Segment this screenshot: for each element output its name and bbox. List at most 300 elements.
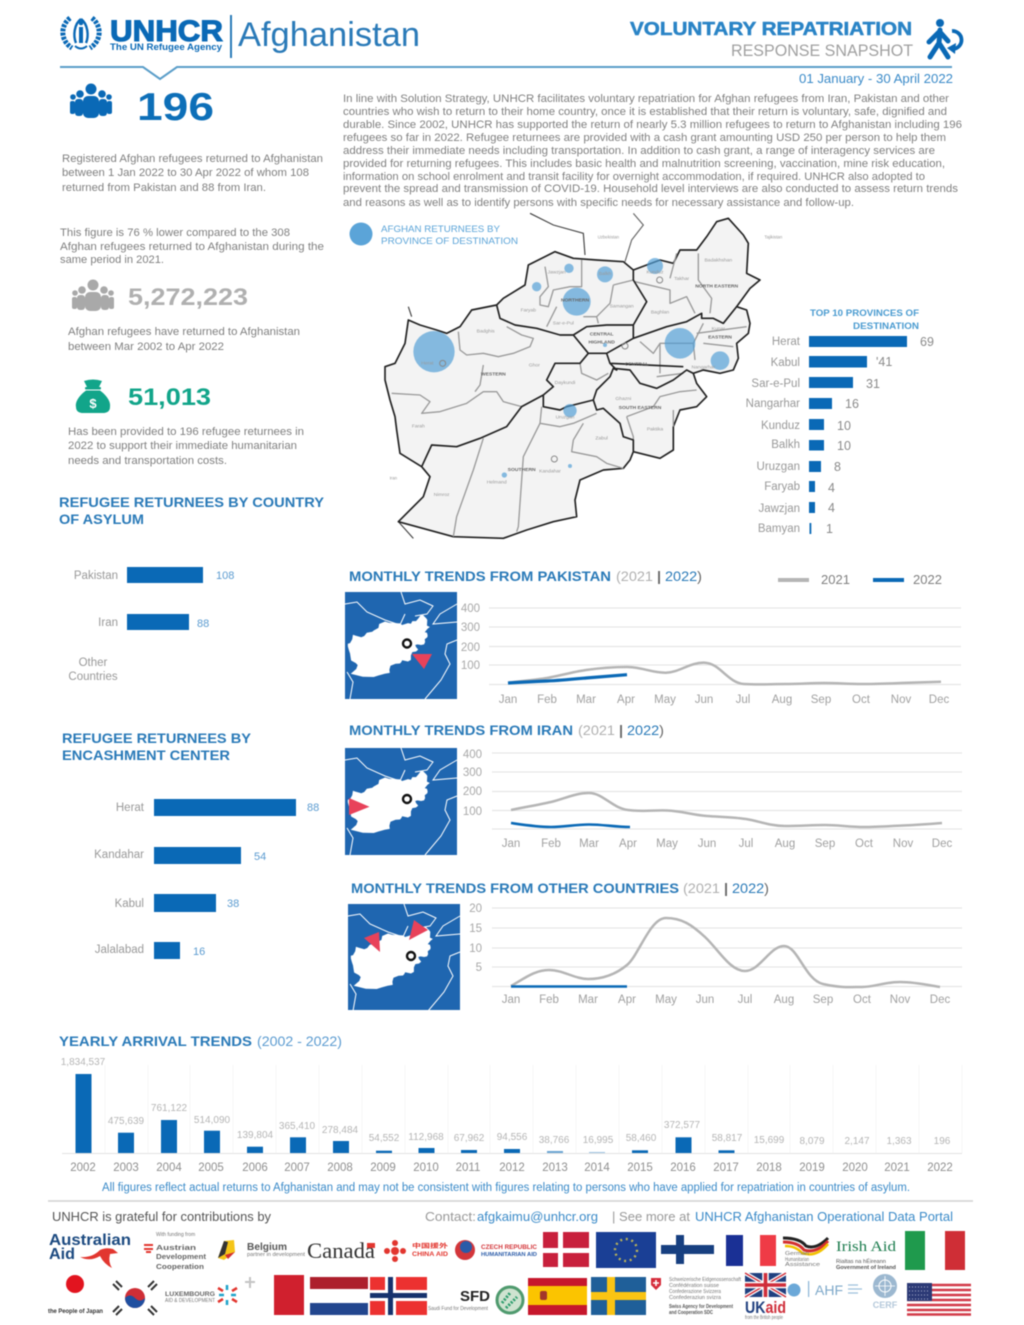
- flag: Spain: [528, 1278, 587, 1315]
- text: registered refugees: between 1 Jan 2022 to 30 Apr 2022 of whom 108: [62, 167, 309, 179]
- icon: person walking with return arrow: [929, 19, 962, 57]
- map labels: [390, 235, 783, 498]
- logo: Australian Aid: Australian: [49, 1232, 131, 1249]
- province labels: Kunduz: [761, 420, 800, 432]
- logo: China Aid: 中国援外: [412, 1242, 448, 1250]
- flag: Italy: [905, 1231, 965, 1270]
- icon: people group grey: [72, 280, 114, 311]
- line chart: other countries: Jan: [502, 994, 520, 1006]
- text: cash grant description: needs and transportation costs.: [68, 455, 227, 467]
- mini map: Iran route: [345, 748, 457, 855]
- icon: UNHCR wreath emblem: [63, 18, 99, 48]
- line chart: Iran: Apr: [619, 838, 637, 850]
- values: 8: [834, 460, 841, 474]
- values: '41: [876, 355, 892, 369]
- line chart: Pakistan: 200: [461, 642, 480, 654]
- heading: returnees by country of asylum: OF ASYLUM: [59, 511, 144, 527]
- footer: thanks: UNHCR is grateful for contributions by: [52, 1209, 271, 1224]
- flag: France: [726, 1235, 776, 1266]
- values: 16: [845, 397, 859, 411]
- province labels: Faryab: [764, 481, 800, 493]
- map labels: CENTRAL: [625, 361, 649, 367]
- flag: Finland: [661, 1235, 714, 1264]
- line chart: other countries: 20: [469, 903, 482, 915]
- yearly axis labels: 2006: [242, 1162, 268, 1174]
- map labels: Badakhshan: [704, 258, 732, 264]
- map labels: Kunar: [712, 326, 725, 332]
- map labels: Nangarhar: [692, 364, 715, 370]
- map labels: Kunduz: [647, 269, 664, 275]
- chart: returnees by country: 108: [216, 570, 234, 582]
- yearly axis labels: 2013: [542, 1162, 568, 1174]
- logo: UK aid: from the British people: [745, 1315, 783, 1321]
- logo: Germany: German: [785, 1251, 809, 1257]
- yearly axis labels: 2016: [670, 1162, 696, 1174]
- line chart: other countries: 15: [469, 923, 482, 935]
- line chart: Pakistan: Nov: [891, 694, 911, 706]
- map bubbles: [413, 258, 729, 478]
- logo: Korea: [113, 1281, 157, 1315]
- intro paragraph: address their immediate needs including transportation. In addition to cash grant, a range of interagency services are: [343, 145, 935, 157]
- header rule with notch: [60, 67, 952, 79]
- map region borders: [422, 270, 737, 467]
- text: comparison: [60, 227, 324, 266]
- logo: Switzerland: Confederaziun svizra: [669, 1295, 721, 1301]
- text: cash grant description: 2022 to support their immediate humanitarian: [68, 440, 297, 452]
- map country shape: [385, 218, 760, 538]
- heading: returnees by encashment center: ENCASHMENT CENTER: [62, 747, 230, 763]
- yearly value labels: 54,552: [369, 1133, 400, 1144]
- chart: encashment center: Kandahar: [94, 849, 144, 861]
- heading: returnees by country of asylum: REFUGEE RETURNEES BY COUNTRY: [59, 494, 325, 510]
- heading: voluntary repatriation: VOLUNTARY REPATRIATION: [630, 19, 912, 39]
- flag: Norway: [370, 1277, 427, 1315]
- map labels: Iran: [390, 475, 398, 480]
- logo: UK aid: UKaid: [745, 1298, 786, 1317]
- yearly value labels: 16,995: [583, 1135, 614, 1146]
- logo: AHF: [788, 1281, 862, 1298]
- line chart: Pakistan: 400: [461, 603, 480, 615]
- text: cash grant description: Has been provided to 196 refugee returnees in: [68, 426, 304, 438]
- flag: United States: [907, 1283, 971, 1315]
- logo: Irish Aid: Government of Ireland: [836, 1265, 896, 1271]
- line chart: Pakistan: Jul: [736, 694, 750, 706]
- map labels: Jawzjan: [548, 269, 566, 275]
- intro paragraph: countries who wish to return to their home country, once it is established that their return is voluntary, safe, dignified and: [343, 106, 947, 118]
- province labels: Bamyan: [758, 523, 800, 535]
- line chart: Iran: Aug: [775, 838, 795, 850]
- line chart: Pakistan: Dec: [929, 694, 949, 706]
- yearly axis labels: 2014: [584, 1162, 610, 1174]
- chart legend: 2022: [913, 572, 942, 587]
- map: Afghanistan returnees by province: [385, 213, 783, 538]
- map labels: Helmand: [487, 479, 507, 485]
- footer: contact: [425, 1209, 953, 1224]
- map labels: SOUTH EASTERN: [619, 405, 662, 411]
- heading: yearly arrival trends: [59, 1033, 342, 1049]
- chart: returnees by country: 88: [197, 618, 209, 630]
- line chart: other countries: May: [655, 994, 677, 1006]
- intro paragraph: [343, 93, 962, 209]
- yearly axis labels: 2003: [113, 1162, 139, 1174]
- yearly axis labels: 2019: [799, 1162, 825, 1174]
- chart: returnees by country: Other: [79, 657, 108, 669]
- chart: encashment center: 88: [307, 802, 319, 814]
- yearly axis labels: 2005: [198, 1162, 224, 1174]
- map labels: NORTHERN: [561, 298, 590, 304]
- text: comparison: same period in 2021.: [60, 254, 164, 266]
- heading: yearly arrival trends: YEARLY ARRIVAL TRENDS: [59, 1033, 252, 1049]
- line chart: other countries: Apr: [618, 994, 636, 1006]
- line chart: other countries: 5: [476, 962, 482, 974]
- line chart: Iran: 200: [463, 786, 482, 798]
- province labels: Balkh: [771, 439, 800, 451]
- line chart: Iran: 300: [463, 767, 482, 779]
- yearly value labels: 1,363: [886, 1136, 912, 1147]
- line chart: Iran: Dec: [932, 838, 952, 850]
- province labels: Sar-e-Pul: [751, 378, 800, 390]
- line chart: other countries: [469, 903, 962, 1006]
- logo: Germany: Humanitarian: [785, 1257, 809, 1263]
- text: total returned description: between Mar 2002 to Apr 2022: [68, 341, 224, 353]
- yearly value labels: 94,556: [497, 1132, 528, 1143]
- yearly value labels: 112,968: [408, 1132, 444, 1143]
- chart: returnees by country: [68, 567, 234, 683]
- map labels: Daykundi: [555, 380, 575, 386]
- line chart: other countries: Dec: [930, 994, 950, 1006]
- text: total returned description: Afghan refugees have returned to Afghanistan: [68, 326, 300, 338]
- yearly axis labels: 2011: [456, 1162, 480, 1174]
- chart title: TOP 10 PROVINCES OF: [810, 308, 919, 319]
- map labels: EASTERN: [708, 334, 732, 340]
- yearly axis labels: 2017: [713, 1162, 739, 1174]
- yearly value labels: 365,410: [279, 1121, 316, 1132]
- line chart: Iran: 400: [463, 749, 482, 761]
- line chart: other countries: 10: [469, 943, 482, 955]
- map labels: Paktika: [647, 427, 663, 433]
- map labels: Badghis: [477, 328, 495, 334]
- logo: Luxembourg: LUXEMBOURG: [165, 1292, 215, 1298]
- yearly value labels: 58,460: [626, 1133, 657, 1144]
- flag: red panel: [274, 1275, 304, 1315]
- yearly value labels: 8,079: [799, 1136, 825, 1147]
- heading: yearly arrival trends: (2002 - 2022): [257, 1034, 342, 1049]
- values: 1: [826, 522, 833, 536]
- stat: 196: 196: [137, 86, 214, 129]
- line chart: other countries: Feb: [539, 994, 559, 1006]
- flag: Netherlands: [310, 1277, 368, 1315]
- chart: encashment center: [94, 799, 319, 959]
- logo: Switzerland: Schweizerische Eidgenossenschaft: [669, 1277, 742, 1283]
- line chart: other countries: Jun: [696, 994, 714, 1006]
- line chart: Pakistan: Feb: [537, 694, 557, 706]
- icon: money bag: $: [89, 396, 97, 411]
- line chart: Iran: Oct: [855, 838, 874, 850]
- flag: Sweden: [591, 1277, 646, 1315]
- line chart: Pakistan: 300: [461, 622, 480, 634]
- line chart: Pakistan: [461, 603, 961, 706]
- flag: European Union: [596, 1232, 656, 1268]
- text: total returned description: [68, 326, 300, 353]
- footer: contact: Contact:: [425, 1209, 476, 1224]
- logo: Australian Aid: Aid: [49, 1246, 75, 1263]
- province labels: Nangarhar: [746, 398, 800, 410]
- line chart: Iran: 100: [463, 806, 482, 818]
- logo: Switzerland: Confederazione Svizzera: [669, 1289, 721, 1295]
- logo: Austrian Development Cooperation: Development: [156, 1254, 207, 1261]
- heading: monthly trends from Iran: MONTHLY TRENDS FROM IRAN: [349, 722, 573, 738]
- intro paragraph: and reasons as well as to identify persons with specific needs for necessary assistance and follow-up.: [343, 197, 854, 209]
- yearly axis labels: 2009: [370, 1162, 396, 1174]
- chart: returnees by country: Pakistan: [74, 570, 118, 582]
- chart: encashment center: Herat: [116, 802, 145, 814]
- divider beside logo: [230, 15, 232, 58]
- yearly value labels: 278,484: [322, 1125, 359, 1136]
- map labels: Farah: [412, 424, 425, 430]
- map labels: Baghlan: [651, 309, 669, 315]
- logo: Switzerland: Confédération suisse: [669, 1283, 719, 1289]
- yearly value labels: 196: [934, 1136, 951, 1147]
- logo: Saudi Fund for Development: SFD: [460, 1288, 490, 1305]
- logo: Austrian Development Cooperation: Cooperation: [156, 1264, 204, 1271]
- header: UNHCR logo: The UN Refugee Agency: [110, 42, 223, 53]
- line chart: other countries: Mar: [578, 994, 598, 1006]
- yearly value labels: 475,639: [108, 1116, 145, 1127]
- intro paragraph: In line with Solution Strategy, UNHCR facilitates voluntary repatriation for Afghan refugees from Iran, Pakistan and other: [343, 93, 949, 105]
- logo: Japan: [48, 1275, 103, 1315]
- values: 4: [828, 481, 835, 495]
- yearly value labels: 58,817: [712, 1133, 743, 1144]
- line chart: Pakistan: Sep: [811, 694, 831, 706]
- logo: Belgium: partner in development: [247, 1252, 306, 1258]
- line chart: other countries: Nov: [890, 994, 910, 1006]
- logo: China Aid: [384, 1240, 449, 1262]
- yearly value labels: 2,147: [844, 1136, 870, 1147]
- stat: cash grant: 51,013: [128, 384, 211, 411]
- map province borders: [392, 253, 747, 537]
- yearly axis labels: 2021: [884, 1162, 910, 1174]
- province labels: Uruzgan: [757, 461, 800, 473]
- yearly value labels: 514,090: [194, 1115, 231, 1126]
- line chart: Iran: May: [656, 838, 678, 850]
- map neighbours borders: [398, 213, 585, 538]
- footer: contact: | See more at: [612, 1209, 690, 1224]
- heading: returnees by encashment center: REFUGEE RETURNEES BY: [62, 730, 252, 746]
- yearly value labels: 1,834,537: [61, 1057, 106, 1068]
- heading: monthly trends from Iran: (2021 | 2022): [578, 723, 664, 738]
- line chart: Iran: Jan: [502, 838, 520, 850]
- heading: monthly trends from other countries: (2021 | 2022): [683, 881, 769, 896]
- map labels: Ghor: [529, 363, 540, 369]
- line chart: Pakistan: Apr: [617, 694, 635, 706]
- heading: returnees by country of asylum: [59, 494, 325, 527]
- title: Afghanistan: [238, 16, 420, 54]
- intro paragraph: provided for returning refugees. This includes basic health and malnutrition screening, vaccination, mine risk education,: [343, 158, 945, 170]
- logo: Switzerland: and Cooperation SDC: [669, 1310, 713, 1316]
- logo: Japan: the People of Japan: [48, 1309, 103, 1315]
- intro paragraph: durable. Since 2002, UNHCR has supported the return of nearly 5.3 million refugees to return to Afghanistan including 196: [343, 119, 962, 131]
- map labels: Nimroz: [434, 492, 450, 498]
- heading: monthly trends from other countries: MONTHLY TRENDS FROM OTHER COUNTRIES: [351, 880, 679, 896]
- subheading: RESPONSE SNAPSHOT: [731, 42, 913, 60]
- chart: encashment center: Jalalabad: [95, 944, 144, 956]
- values: 69: [920, 335, 934, 349]
- chart: encashment center: Kabul: [115, 898, 144, 910]
- map legend: AFGHAN RETURNEES BY: [381, 224, 501, 235]
- province labels: Herat: [772, 336, 801, 348]
- province labels: Jawzjan: [758, 503, 800, 515]
- heading: monthly trends from Iran: [349, 722, 664, 738]
- logo: Austrian Development Cooperation: Austrian: [156, 1245, 196, 1252]
- text: registered refugees: Registered Afghan refugees returned to Afghanistan: [62, 153, 323, 165]
- yearly bars: [76, 1074, 734, 1153]
- map city markers: [440, 277, 663, 462]
- line chart: other countries: Sep: [813, 994, 833, 1006]
- map legend: [350, 222, 518, 247]
- chart: encashment center: 54: [254, 851, 266, 863]
- chart legend: 2021: [821, 572, 850, 587]
- line chart: Iran: Jun: [698, 838, 716, 850]
- line chart: Pakistan: Mar: [576, 694, 596, 706]
- logo: Germany: [783, 1238, 828, 1268]
- yearly axis labels: 2002: [70, 1162, 96, 1174]
- values: [826, 335, 934, 536]
- text: comparison: This figure is 76 % lower compared to the 308: [60, 227, 290, 239]
- logo: Switzerland: [651, 1277, 742, 1316]
- logo: Austrian Development Cooperation: With funding from: [156, 1232, 195, 1238]
- map labels: Uruzgan: [556, 414, 575, 420]
- line chart: Iran: Nov: [893, 838, 913, 850]
- chart footnote: All figures reflect actual returns to Afghanistan and may not be consistent with figures relating to persons who have applied for repatriation in countries of asylum.: [102, 1182, 910, 1194]
- map labels: Samangan: [610, 303, 634, 309]
- logo: Australian Aid: [49, 1232, 131, 1268]
- map labels: Herat: [421, 360, 434, 366]
- icon: people group blue: [70, 84, 112, 118]
- map labels: Balkh: [599, 271, 611, 277]
- line chart: other countries: Jul: [738, 994, 752, 1006]
- map labels: Faryab: [521, 308, 536, 314]
- values: 10: [837, 439, 851, 453]
- line chart: Iran: [463, 749, 962, 850]
- stat: total returned: 5,272,223: [128, 284, 248, 311]
- yearly axis labels: 2012: [499, 1162, 525, 1174]
- chart: encashment center: 38: [227, 898, 239, 910]
- map labels: CENTRAL: [590, 331, 614, 337]
- line chart: Iran: Jul: [739, 838, 753, 850]
- chart: top 10 provinces of destination: [746, 308, 934, 536]
- text: comparison: Afghan refugees returned to Afghanistan during the: [60, 241, 324, 253]
- logo: Luxembourg: [165, 1285, 237, 1305]
- map labels: NORTH EASTERN: [695, 283, 739, 289]
- chart title: DESTINATION: [853, 321, 919, 332]
- logo: Czech Republic: CZECH REPUBLIC: [481, 1245, 538, 1251]
- text: registered refugees: returned from Pakistan and 88 from Iran.: [62, 182, 266, 194]
- line chart: Pakistan: Oct: [852, 694, 871, 706]
- chart: returnees by country: Countries: [68, 671, 118, 683]
- yearly value labels: [61, 1057, 951, 1147]
- chart: returnees by country: Iran: [98, 617, 118, 629]
- logo: Saudi Fund for Development: [428, 1287, 523, 1313]
- date: 01 January - 30 April 2022: [799, 71, 953, 86]
- chart title: [810, 308, 919, 332]
- values: 10: [837, 419, 851, 433]
- line chart: Pakistan: May: [654, 694, 676, 706]
- logo: Germany: Assistance: [785, 1262, 820, 1268]
- yearly value labels: 15,699: [754, 1135, 785, 1146]
- map labels: Sar-e-Pul: [553, 320, 574, 326]
- yearly axis labels: 2008: [327, 1162, 353, 1174]
- logo: China Aid: CHINA AID: [412, 1252, 449, 1258]
- logo: Saudi Fund for Development: Saudi Fund for Development: [428, 1306, 489, 1312]
- yearly axis labels: 2015: [627, 1162, 653, 1174]
- logo: Irish Aid: [836, 1239, 897, 1271]
- mini map: Pakistan route: [345, 592, 457, 699]
- yearly axis labels: 2007: [284, 1162, 310, 1174]
- map labels: Tajikistan: [764, 235, 783, 240]
- line chart: Pakistan: Aug: [772, 694, 792, 706]
- line chart: other countries: Oct: [853, 994, 872, 1006]
- yearly value labels: 38,766: [539, 1135, 570, 1146]
- footer: contact: UNHCR Afghanistan Operational Data Portal: [695, 1209, 953, 1224]
- logo: Switzerland: Swiss Agency for Development: [669, 1304, 733, 1310]
- map labels: Kandahar: [539, 469, 561, 475]
- logo: Czech Republic: [455, 1240, 538, 1260]
- chart legend: [778, 572, 942, 587]
- icon: money bag: [76, 380, 110, 413]
- line chart: Pakistan: Jun: [695, 694, 713, 706]
- bar chart: yearly arrivals: [61, 1057, 962, 1174]
- logo: Irish Aid: Rialtas na hÉireann: [836, 1258, 886, 1265]
- line chart: Iran: Feb: [541, 838, 561, 850]
- province labels: [746, 336, 801, 535]
- logo: CERF: [873, 1274, 898, 1310]
- header: UNHCR logo: [63, 15, 223, 53]
- map labels: Ghazni: [615, 396, 631, 402]
- yearly value labels: 372,577: [664, 1120, 701, 1131]
- logo: AHF: AHF: [815, 1282, 843, 1298]
- yearly value labels: 67,962: [454, 1133, 485, 1144]
- line chart: Iran: Sep: [815, 838, 835, 850]
- yearly axis labels: 2022: [927, 1162, 953, 1174]
- logo: CERF: CERF: [873, 1300, 898, 1310]
- flag: Denmark: [543, 1232, 589, 1267]
- mini map: other countries route: [348, 904, 460, 1011]
- map labels: WESTERN: [481, 372, 506, 378]
- heading: monthly trends from Pakistan: (2021 | 2022): [616, 569, 702, 584]
- logo: UK aid: [745, 1273, 786, 1321]
- line chart: Pakistan: 100: [461, 660, 480, 672]
- logo: Belgium: Belgium: [247, 1242, 287, 1253]
- yearly axis labels: 2018: [756, 1162, 782, 1174]
- text: registered refugees: [62, 153, 323, 194]
- map labels: Zabul: [595, 435, 608, 441]
- logo: Luxembourg: AID & DEVELOPMENT: [165, 1298, 215, 1304]
- heading: monthly trends from Pakistan: MONTHLY TRENDS FROM PAKISTAN: [349, 568, 611, 584]
- map labels: Takhar: [674, 276, 689, 282]
- yearly axis labels: [70, 1162, 953, 1174]
- map legend: PROVINCE OF DESTINATION: [381, 236, 518, 247]
- map labels: SOUTHERN: [508, 467, 536, 473]
- line chart: Iran: Mar: [579, 838, 599, 850]
- logo: Canada: Canada: [307, 1238, 375, 1263]
- values: 4: [828, 501, 835, 515]
- yearly value labels: 139,804: [237, 1130, 274, 1141]
- logo: Belgium: [218, 1240, 306, 1260]
- yearly axis labels: 2020: [842, 1162, 868, 1174]
- header: UNHCR logo: UNHCR: [110, 15, 223, 48]
- line chart: Pakistan: Jan: [499, 694, 517, 706]
- intro paragraph: information on school enrolment and transit facility for overnight accommodation, if required. UNHCR also adopted to: [343, 171, 925, 183]
